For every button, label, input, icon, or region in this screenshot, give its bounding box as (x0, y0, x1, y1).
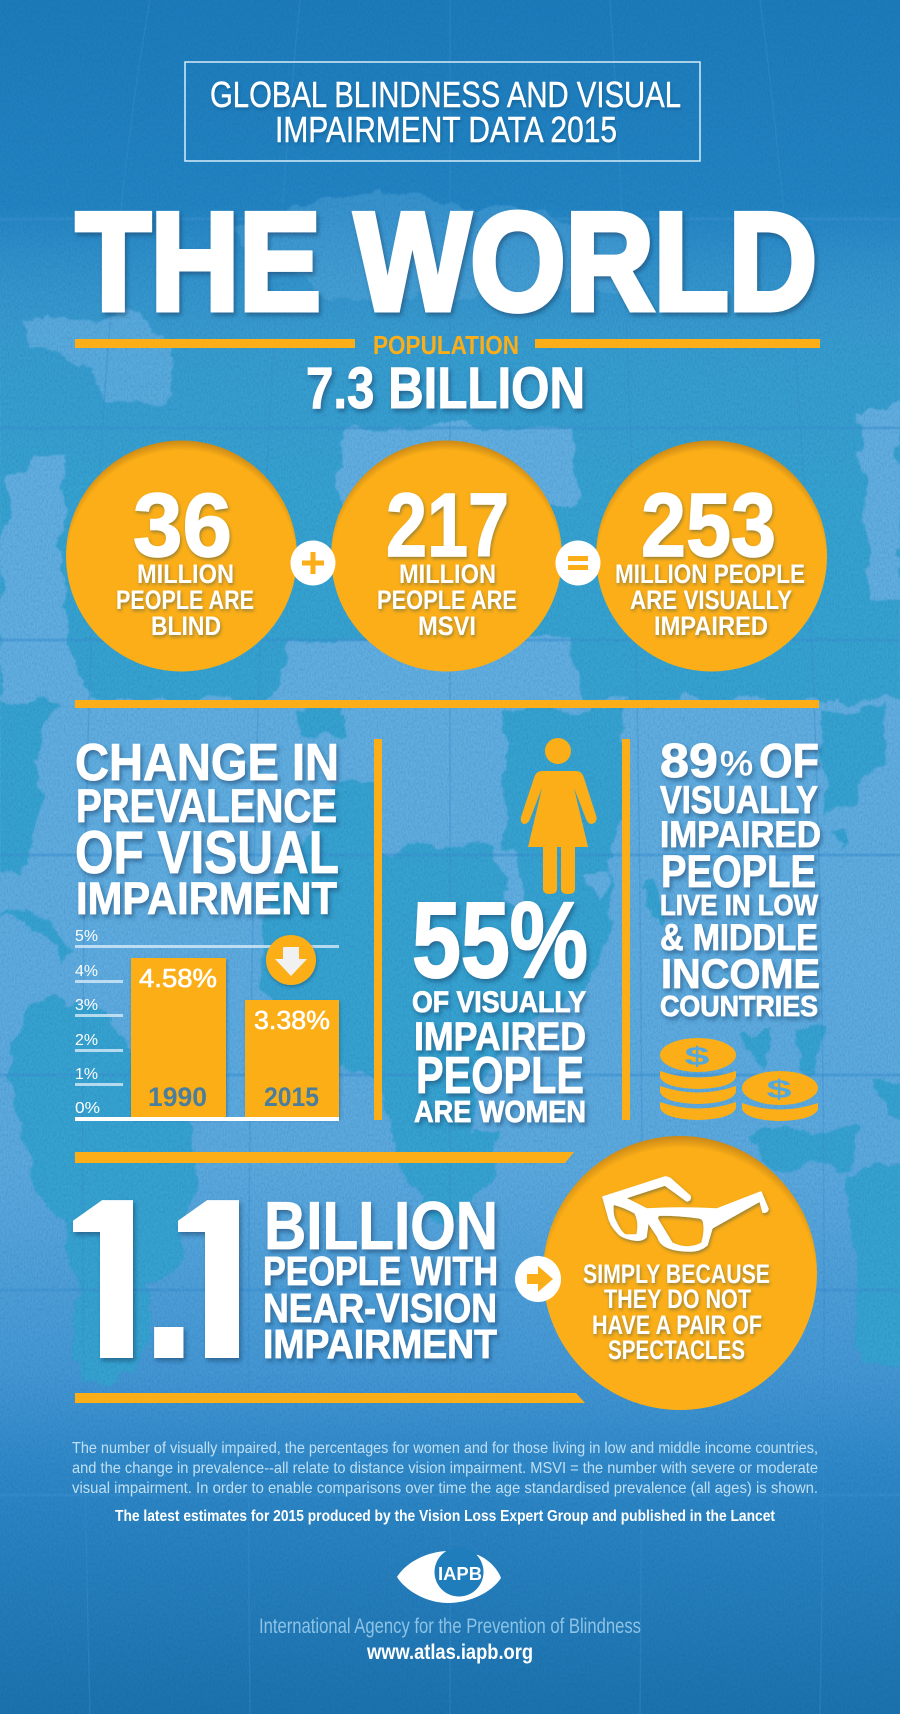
women statistic text (412, 879, 588, 1129)
income statistic text: & MIDDLE (660, 917, 818, 958)
spectacles text: SPECTACLES (608, 1335, 745, 1365)
IAPB logo (397, 1548, 501, 1603)
heading: THE WORLD: THE WORLD (76, 184, 817, 340)
income statistic text: VISUALLY (660, 779, 818, 822)
bar chart: 0% (75, 1100, 100, 1117)
population figure: 7.3 BILLION (306, 356, 585, 421)
women statistic text: IMPAIRED (414, 1015, 586, 1059)
circle text: 253: ARE VISUALLY (630, 585, 792, 615)
bar chart: 5% (75, 928, 98, 945)
bar chart: 4% (75, 963, 98, 980)
circle text: 36: MILLION (137, 559, 234, 589)
panel: low and middle income (660, 735, 821, 1121)
panel heading: OF VISUAL (75, 819, 339, 886)
circle text: 217 (377, 476, 517, 641)
circle text: 253: MILLION PEOPLE (615, 559, 805, 589)
income statistic text: LIVE IN LOW (660, 890, 819, 922)
agency name: International Agency for the Prevention of Blindness (259, 1615, 641, 1638)
panel heading: IMPAIRMENT (76, 873, 337, 924)
figure words: BILLION (264, 1188, 498, 1264)
footnote: The number of visually impaired, the percentages for women and for those living in low and middle income countries, (72, 1440, 818, 1457)
bar chart: 1990 (148, 1082, 207, 1112)
footnote: and the change in prevalence--all relate to distance vision impairment. MSVI = the number with severe or moderate (72, 1460, 818, 1477)
icon: glasses (603, 1177, 768, 1251)
figure words: PEOPLE WITH (263, 1248, 498, 1294)
bar chart (75, 928, 339, 1121)
icon: coins: $ (766, 1075, 792, 1104)
figure digits: 1.1: 1 (162, 1160, 270, 1397)
women statistic text: OF VISUALLY (412, 986, 586, 1019)
icon: down arrow (266, 935, 316, 985)
bar chart: 3.38% (254, 1005, 330, 1035)
circle: 253 million visually impaired (596, 440, 827, 672)
spectacles text: SIMPLY BECAUSE (583, 1259, 770, 1289)
vertical divider (374, 739, 382, 1120)
icon: equals (556, 540, 600, 586)
income statistic text: % (720, 745, 753, 783)
panel heading: PREVALENCE (76, 779, 337, 832)
circle: 217 million MSVI (331, 440, 562, 672)
circle: spectacles (543, 1136, 817, 1410)
vertical divider (622, 739, 630, 1120)
income statistic text: INCOME (661, 950, 820, 997)
circle text: 253: IMPAIRED (654, 611, 768, 641)
women statistic text: PEOPLE (416, 1047, 584, 1105)
income statistic text: 89 (660, 735, 718, 788)
spectacles text: THEY DO NOT (604, 1284, 751, 1314)
bar chart: 2% (75, 1032, 98, 1049)
income statistic text: OF (759, 735, 819, 788)
panel heading (75, 734, 339, 924)
circle text: 36: BLIND (151, 611, 221, 641)
figure words: IMPAIRMENT (263, 1321, 497, 1367)
figure words (263, 1188, 498, 1367)
icon: plus (290, 540, 336, 586)
figure digits: 1.1 (73, 1200, 244, 1364)
bar chart: 2015 (264, 1082, 319, 1112)
title box (185, 62, 700, 161)
population label: POPULATION (373, 330, 519, 360)
top rule of spectacles band (75, 1152, 574, 1163)
icon: coins: $ (684, 1042, 710, 1071)
women statistic text: 55% (412, 879, 588, 1000)
income statistic text: PEOPLE (661, 846, 816, 897)
footnote: visual impairment. In order to enable comparisons over time the age standardised prevalence (all ages) is shown. (72, 1480, 818, 1497)
women statistic text: ARE WOMEN (414, 1094, 586, 1129)
title text: GLOBAL BLINDNESS AND VISUAL (210, 74, 681, 115)
circle text: 36: 36 (133, 476, 232, 576)
panel: women (412, 738, 597, 1129)
income statistic text (660, 735, 821, 1023)
IAPB logo: IAPB (438, 1564, 482, 1584)
circle text: 253: 253 (641, 476, 776, 576)
circle text: 36: PEOPLE ARE (116, 585, 254, 615)
circle text: 217: MILLION (399, 559, 496, 589)
circle text: 217: 217 (386, 476, 509, 576)
income statistic text: COUNTRIES (660, 991, 818, 1023)
circle: 36 million blind (66, 440, 297, 672)
website: www.atlas.iapb.org (366, 1641, 533, 1664)
panel: change in prevalence (75, 734, 339, 1121)
circle text: 253 (615, 476, 805, 641)
figure digits: 1.1: 1 (57, 1160, 165, 1397)
source note: The latest estimates for 2015 produced by the Vision Loss Expert Group and published in the Lancet (115, 1508, 776, 1525)
bottom rule of spectacles band (75, 1393, 585, 1403)
figure: 1.1 billion (73, 1200, 501, 1364)
title text (210, 74, 681, 150)
bar chart: 3% (75, 997, 98, 1014)
section divider (75, 700, 819, 708)
figure digits: 1.1: . (140, 1171, 198, 1403)
circle text: 217: PEOPLE ARE (377, 585, 517, 615)
title text: IMPAIRMENT DATA 2015 (275, 109, 617, 150)
icon: coins (660, 1038, 818, 1121)
population rule (75, 339, 820, 348)
bar chart: 1% (75, 1066, 98, 1083)
footnote (72, 1440, 818, 1497)
figure words: NEAR-VISION (263, 1285, 497, 1331)
spectacles text (583, 1259, 770, 1365)
spectacles text: HAVE A PAIR OF (592, 1310, 762, 1340)
icon: woman (521, 738, 597, 894)
icon: right arrow (515, 1256, 561, 1302)
circle text: 36 (116, 476, 254, 641)
bar chart: 4.58% (139, 963, 217, 993)
income statistic text: IMPAIRED (660, 814, 821, 855)
circle text: 217: MSVI (418, 611, 476, 641)
panel heading: CHANGE IN (75, 734, 339, 792)
